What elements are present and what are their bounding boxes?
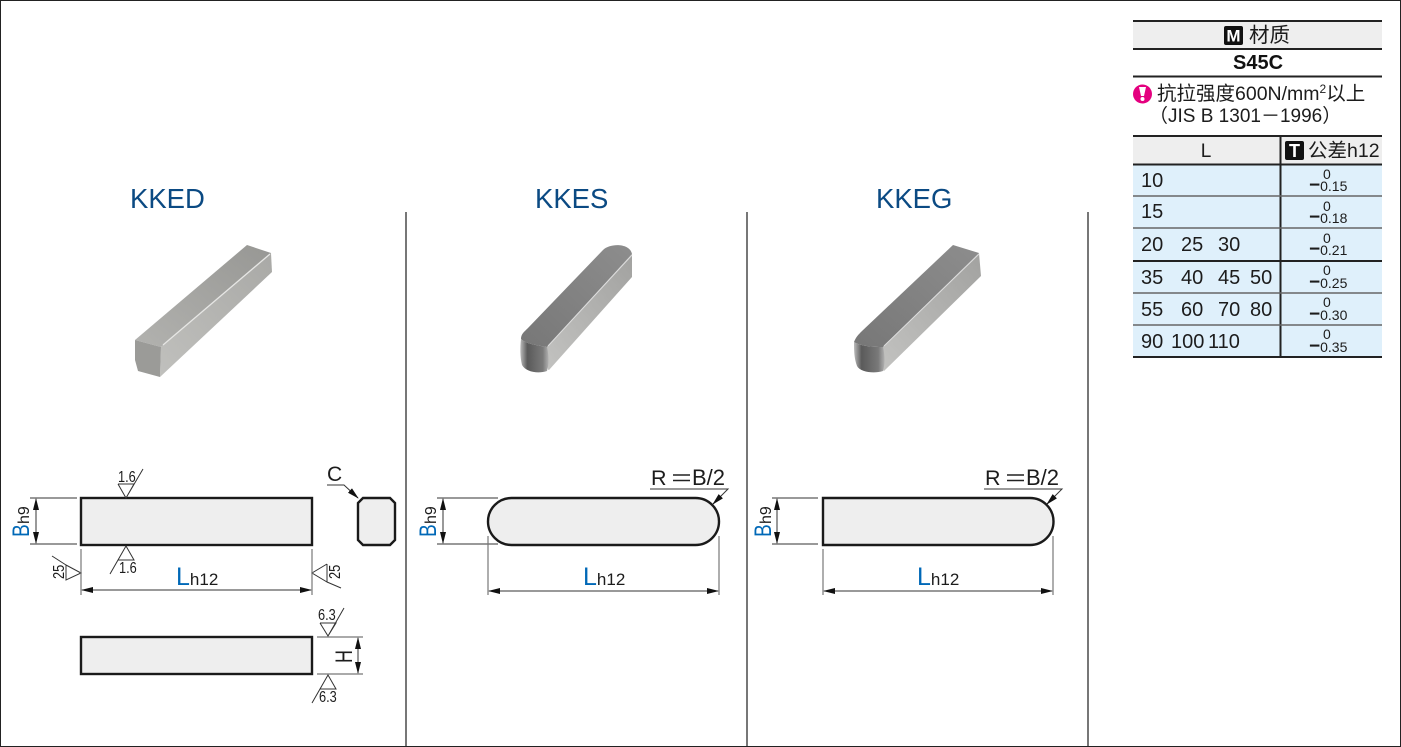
row 15: −0.18 [1309,207,1348,228]
heading: KKEG: KKEG [876,183,952,214]
note: tensile strength: 2 [1320,82,1327,96]
roughness top 6.3: 6.3 [318,607,336,624]
column dividers [406,212,1088,746]
row 55 [1141,294,1348,325]
row 35: 40 [1181,267,1203,289]
radius callout [984,465,1062,504]
roughness top 1.6 [118,469,143,498]
drawing: KKES [414,465,728,595]
heading: KKED: KKED [130,183,205,214]
row 20 [1141,230,1348,260]
B dimension: B [749,524,777,537]
row 20: 20 [1141,234,1163,256]
note: tensile strength [1133,82,1365,127]
roughness bottom 1.6 [110,546,137,577]
lower view rectangle [81,637,312,674]
roughness right 25 [312,564,344,588]
row 35: 50 [1250,267,1272,289]
column header L: L [1201,141,1211,162]
drawing: KKED [7,463,395,706]
B dimension [749,498,818,544]
row 35: 45 [1218,267,1240,289]
roughness left 25: 25 [51,565,68,579]
roughness bottom 6.3 [312,675,337,706]
L dimension: Lh12 [583,563,625,591]
roughness right 25: 25 [327,565,344,579]
B dimension: B [7,524,35,537]
row 35: −0.25 [1309,272,1348,293]
icon: T badge: T [1289,141,1300,161]
radius callout: R [651,466,667,490]
row 90: 90 [1141,331,1163,353]
single round-end outline [823,498,1053,545]
row 55: 60 [1181,299,1203,321]
panel: material [1133,21,1382,76]
row 55: 0 [1323,294,1331,310]
note: tensile strength: 抗拉强度600N/mm [1157,83,1320,105]
row 90: 110 [1208,331,1240,353]
L dimension: Lh12 [917,563,959,591]
rules [1133,136,1382,357]
slot outline [488,498,719,545]
row 35: 0 [1323,262,1331,278]
B dimension: h9 [758,506,775,524]
row 20: −0.21 [1309,239,1348,260]
row 10: 10 [1141,170,1163,192]
note: tensile strength: （JIS B 1301－1996） [1149,105,1341,127]
row 55: 70 [1218,299,1240,321]
radius callout [650,465,728,504]
end view chamfered section [358,498,395,545]
H dimension: H [332,650,358,663]
row 10: −0.15 [1309,175,1348,196]
radius callout: B/2 [692,465,725,490]
material heading: 材质 [1249,24,1290,47]
C callout: C [327,463,342,486]
B dimension [414,498,498,544]
row 90: 0 [1323,326,1331,342]
B dimension: B [414,524,442,537]
radius callout: B/2 [1026,465,1059,490]
roughness bottom 6.3: 6.3 [319,689,337,706]
roughness bottom 1.6: 1.6 [119,560,137,577]
photo: KKED square key [135,245,272,377]
row 90: 100 [1171,331,1204,353]
material value: S45C [1233,52,1283,74]
heading: KKES: KKES [535,183,608,214]
row 55: −0.30 [1309,304,1348,325]
icon: exclamation [1133,84,1152,104]
row 15 [1141,198,1348,228]
photo: KKEG single round-end key [854,245,981,372]
L dimension: Lh12 [176,563,218,591]
icon: M badge: M [1226,26,1241,46]
B dimension: h9 [16,506,33,524]
photo: KKES round-end key [520,245,632,372]
B dimension: h9 [423,506,440,524]
roughness top 6.3 [318,607,344,636]
row 20: 0 [1323,230,1331,246]
B dimension [7,498,77,544]
roughness top 1.6: 1.6 [118,469,136,486]
row 20: 30 [1218,234,1240,256]
row 90: −0.35 [1309,336,1348,357]
row 35 [1141,262,1348,293]
side view rectangle [81,498,312,545]
table: tolerance [1133,136,1382,357]
row 20: 25 [1181,234,1203,256]
row 15: 15 [1141,201,1163,223]
H dimension [317,637,363,674]
drawing: KKEG [749,465,1062,595]
radius callout: R [985,466,1001,490]
row 15: 0 [1323,198,1331,214]
row 10: 0 [1323,166,1331,182]
roughness left 25 [51,556,81,580]
row 55: 55 [1141,299,1163,321]
row 35: 35 [1141,267,1163,289]
column header tolerance: 公差h12 [1308,140,1380,162]
row 10 [1141,166,1348,196]
row 90 [1141,326,1348,357]
row 55: 80 [1250,299,1272,321]
note: tensile strength: 以上 [1326,83,1365,105]
icon: T badge [1285,141,1304,161]
C callout [327,463,358,498]
